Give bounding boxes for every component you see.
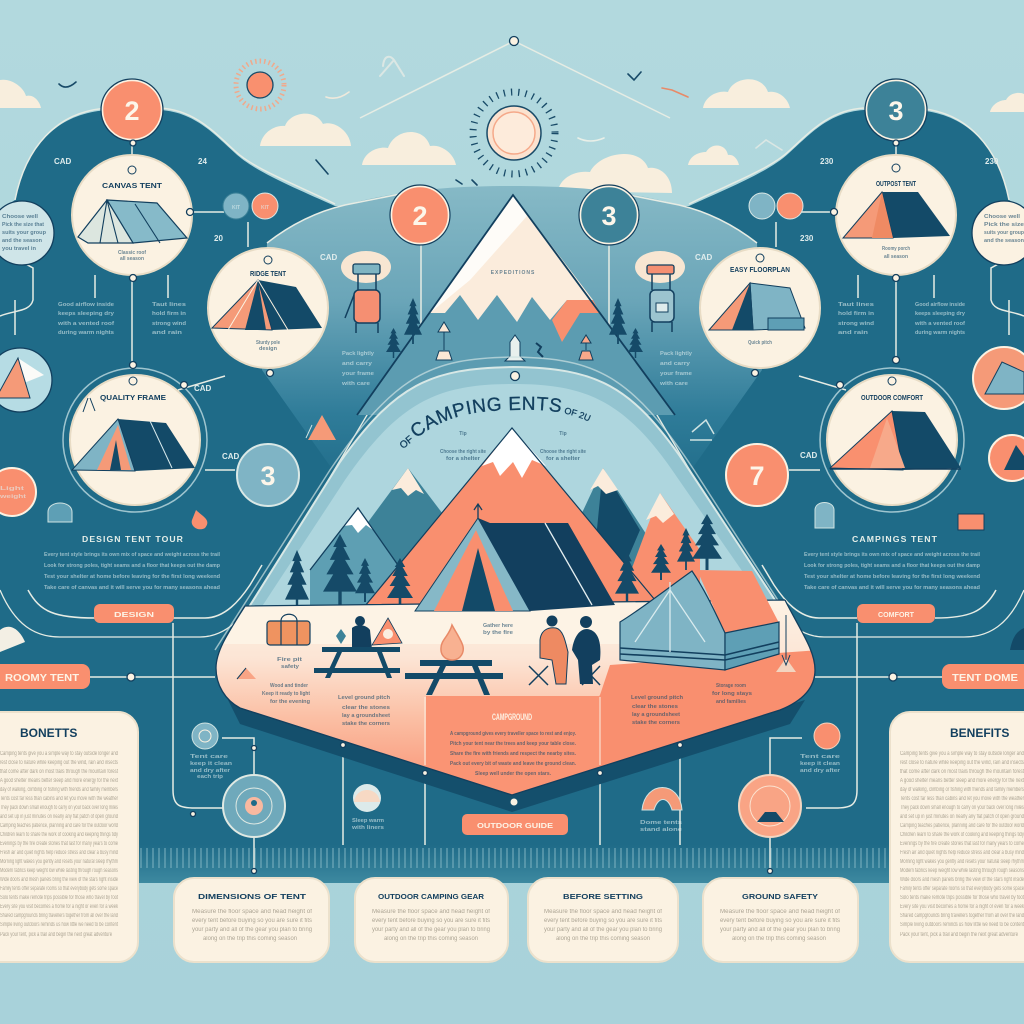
side circle: top right: and the season <box>984 238 1024 244</box>
benefits panel left: Family tents offer separate rooms so that everybody gets some space <box>0 886 118 892</box>
bottom card 4: every tent before buying so you are sure it fits <box>720 918 840 924</box>
benefits panel left <box>0 712 138 962</box>
badge 3 centre: 3 <box>601 201 617 231</box>
benefits panel left: Every site you visit becomes a home for a night or even for a week <box>0 904 119 910</box>
small numeric labels: CAD <box>800 451 818 460</box>
text block: left under circle 1: keeps sleeping dry <box>58 311 114 317</box>
small plate labels: Gather here <box>483 623 513 629</box>
badge 2 left top <box>101 79 163 146</box>
side circle: top left: Pick the size that <box>2 222 44 228</box>
small plate labels: Level ground pitch <box>338 695 390 701</box>
text block: left under circle 1: and rain <box>152 330 182 336</box>
side circle: top right: Choose well <box>984 214 1021 220</box>
side circle: top left: suits your group <box>2 230 46 236</box>
bottom plate marker <box>510 798 518 806</box>
small plate labels: stake the corners <box>342 721 390 727</box>
arch top marker <box>510 372 520 380</box>
text block: right under circle 1: Good airflow inside <box>915 302 965 308</box>
text block: lower left heading: Look for strong poles, tight seams and a floor that keeps out the damp <box>44 563 220 569</box>
bottom card 1: DIMENSIONS OF TENT <box>198 894 307 901</box>
captions beside bottom icons: Tent care <box>190 754 228 760</box>
tent circle: left top: CANVAS TENT <box>102 183 163 190</box>
captions beside bottom icons: and dry after <box>190 768 230 774</box>
small plate labels: Storage room <box>716 683 747 689</box>
left dome shape <box>0 627 25 652</box>
small plate labels <box>262 623 752 727</box>
benefits panel left: Pack your tent, pick a trail and begin the next great adventure <box>0 932 112 938</box>
plate outline <box>216 600 815 795</box>
bottom card 4: along on the trip this coming season <box>732 936 826 942</box>
small round icons right pair <box>749 193 803 219</box>
bottom card 2: OUTDOOR CAMPING GEAR <box>378 894 484 901</box>
mountain pins and markers <box>436 322 593 361</box>
captions beside bottom icons: Sleep warm <box>352 818 385 824</box>
pill: left lower: ROOMY TENT <box>5 673 79 684</box>
small plate labels: lay a groundsheet <box>632 712 680 718</box>
arch small captions: for a shelter <box>546 456 580 462</box>
text block: left under circle 1: strong wind <box>152 321 186 327</box>
campground text block: Pitch your tent near the trees and keep your table close. <box>450 741 577 747</box>
small plate labels: Level ground pitch <box>631 695 683 701</box>
small plate labels: clear the stones <box>342 705 390 711</box>
bottom card 3 <box>528 878 678 962</box>
mountain peak: EXPEDITIONS <box>491 270 535 276</box>
text block: left under circle 1: hold firm in <box>152 311 186 317</box>
small plate labels: by the fire <box>483 630 513 636</box>
text block: left under circle 1 <box>57 302 186 336</box>
text block: left under circle 1: Good airflow inside <box>58 302 114 308</box>
side badge: coral left <box>0 468 36 516</box>
text block: lower left heading <box>44 535 221 591</box>
side text under backpacks: with care <box>341 381 370 387</box>
pine trees beside the mountain <box>386 298 643 358</box>
tent circle: left middle: design <box>259 346 277 352</box>
campsite plate shadow <box>228 700 805 812</box>
tent circle: right middle: Quick pitch <box>748 340 772 346</box>
main sun with peak line <box>360 36 670 174</box>
bottom card 3: BEFORE SETTING <box>563 894 644 901</box>
small numeric labels <box>54 157 999 461</box>
tent circle: left bottom <box>63 368 207 512</box>
benefits panel left: A good shelter means better sleep and more energy for the next <box>0 778 118 784</box>
central mid-teal region <box>262 186 762 480</box>
text block: lower right heading: Take care of canvas and it will serve you for many seasons ahead <box>804 585 980 591</box>
small plate labels: lay a groundsheet <box>342 713 390 719</box>
side text under backpacks: with care <box>659 381 688 387</box>
arch small captions: Tip <box>459 431 467 437</box>
tent circle: right middle: EASY FLOORPLAN <box>730 267 790 274</box>
tent circle: left bottom: QUALITY FRAME <box>100 395 166 402</box>
tent circle: right middle <box>700 248 820 368</box>
bottom card 2: every tent before buying so you are sure it fits <box>372 918 490 924</box>
bottom card 4 <box>703 878 858 962</box>
benefits panel left: Evenings by the fire create stories that last for many years to come <box>0 841 118 847</box>
tent circle: left middle <box>208 248 328 368</box>
bottom card 3: Measure the floor space and head height of <box>544 909 662 915</box>
benefits panel left: Solo tents make remote trips possible for those who travel by foot <box>0 895 118 901</box>
pill: right lower: TENT DOME <box>952 673 1018 684</box>
arch small captions: Tip <box>559 431 567 437</box>
text block: right under circle 1: strong wind <box>838 321 874 327</box>
side circle: tent left <box>0 348 52 412</box>
small sun <box>236 61 284 109</box>
text block: lower right heading <box>804 535 981 591</box>
arch small captions: for a shelter <box>446 456 480 462</box>
tent circle: left middle: Sturdy pole <box>256 340 280 346</box>
text block: lower right heading: Every tent style brings its own mix of space and weight across the trail <box>804 552 981 558</box>
benefits panel right <box>890 712 1024 962</box>
badge 3 centre <box>579 185 639 245</box>
text block: right under circle 1: during warm nights <box>915 330 965 336</box>
small round icons left pair: KIT <box>232 205 240 211</box>
pill: centre bottom: OUTDOOR GUIDE <box>477 821 553 830</box>
tent circle: right bottom: OUTDOOR COMFORT <box>861 395 924 402</box>
picnic table left <box>314 647 400 678</box>
captions beside bottom icons: keep it clean <box>800 761 840 767</box>
tent circle: right top: OUTPOST TENT <box>876 181 917 188</box>
bottom card 2: Measure the floor space and head height of <box>372 909 490 915</box>
side circle: top left <box>0 201 54 265</box>
tent circle: left top <box>72 155 192 275</box>
side circle: top left: and the season <box>2 238 42 244</box>
arch small captions <box>440 431 586 462</box>
forest trees <box>285 514 722 612</box>
bottom card 4: your party and all of the gear you plan to bring <box>720 927 840 933</box>
captions beside bottom icons <box>190 754 840 833</box>
bottom card 4: Measure the floor space and head height of <box>720 909 840 915</box>
captions beside bottom icons: and dry after <box>800 768 840 774</box>
captions beside bottom icons: keep it clean <box>190 761 232 767</box>
pill: right upper <box>857 604 935 623</box>
side circle: top right <box>972 201 1024 265</box>
text block: right under circle 1: and rain <box>838 330 868 336</box>
small numeric labels: CAD <box>222 452 240 461</box>
text block: lower left heading: Take care of canvas and it will serve you for many seasons ahead <box>44 585 220 591</box>
people seated pair <box>529 616 600 685</box>
tent circle: left middle: RIDGE TENT <box>250 271 287 278</box>
badge 2 centre: 2 <box>412 201 428 231</box>
benefits panel left: Camping teaches patience, planning and care for the outdoor world <box>0 823 118 829</box>
small numeric labels: CAD <box>54 157 72 166</box>
bottom card 1: Measure the floor space and head height of <box>192 909 312 915</box>
bottom card 3: along on the trip this coming season <box>556 936 650 942</box>
benefits panel left: day of walking, climbing or fishing with friends and family members <box>0 787 118 793</box>
side badge: coral left: weight <box>0 494 27 500</box>
small plate labels: clear the stones <box>632 704 678 710</box>
text block: lower left heading: DESIGN TENT TOUR <box>82 535 184 544</box>
picnic table centre <box>405 660 503 695</box>
benefits panel left: Modern fabrics keep weight low while lasting through rough seasons <box>0 868 118 874</box>
small numeric labels: 230 <box>820 157 834 166</box>
text block: lower left heading: Every tent style brings its own mix of space and weight across the trail <box>44 552 221 558</box>
side text under backpacks: Pack lightly <box>660 351 692 357</box>
text block: right under circle 1: with a vented roof <box>914 321 965 327</box>
side text under backpacks <box>341 351 692 387</box>
bottom card 3: your party and all of the gear you plan to bring <box>544 927 662 933</box>
hump outline strokes <box>15 108 1009 204</box>
birds and sky marks <box>59 57 782 185</box>
benefits panel left: rest close to nature while keeping out the wind, rain and insects <box>0 760 118 766</box>
small numeric labels: 20 <box>214 234 223 243</box>
small numeric labels: CAD <box>695 253 713 262</box>
side circle: top right: suits your group <box>984 230 1024 236</box>
right dome shape <box>1010 628 1024 650</box>
decorative lines around centre arch <box>215 357 810 650</box>
bottom card 4: GROUND SAFETY <box>742 894 818 901</box>
badge 3 lower left <box>237 444 299 506</box>
plate dividers <box>425 697 600 765</box>
tent circle: left top: all season <box>120 256 144 262</box>
small plate labels: stake the corners <box>632 720 680 726</box>
side text under backpacks: your frame <box>660 371 692 377</box>
connector lines <box>0 140 1024 872</box>
captions beside bottom icons: with liners <box>351 825 384 831</box>
side text under backpacks: Pack lightly <box>342 351 374 357</box>
small round icons left pair <box>223 193 278 219</box>
bottom icons <box>192 723 840 837</box>
pill: right lower <box>942 664 1024 689</box>
benefits panel left: Shared campgrounds bring travellers together from all over the land <box>0 913 118 919</box>
tent circle: right top: Roomy porch <box>882 246 910 252</box>
small plate labels: Fire pit <box>277 657 302 663</box>
bottom card 2: along on the trip this coming season <box>384 936 478 942</box>
tent circle: right bottom <box>820 368 964 512</box>
side text under backpacks: and carry <box>660 361 690 367</box>
text block: right under circle 1 <box>838 302 965 336</box>
text block: left under circle 1: Taut lines <box>152 302 186 308</box>
badge 2 centre <box>390 185 450 245</box>
tent circle: right top <box>836 155 956 275</box>
small round icons left pair: KIT <box>261 205 269 211</box>
campground text block: Sleep well under the open stars. <box>475 771 552 777</box>
tent circle: left top: Classic roof <box>118 250 146 256</box>
gear bag <box>267 614 310 645</box>
connector dots <box>127 208 900 874</box>
captions beside bottom icons: Dome tents <box>640 820 682 826</box>
badge 7 lower right: 7 <box>749 461 765 491</box>
tent circle: right top: all season <box>884 254 908 260</box>
mountain peak <box>357 195 675 415</box>
benefits panel left: and set up in just minutes on nearly any flat patch of open ground <box>0 814 118 820</box>
small plate labels: and families <box>716 699 746 705</box>
text block: lower right heading: CAMPINGS TENT <box>852 535 938 544</box>
benefits panel left: Children learn to share the work of cooking and keeping things tidy <box>0 832 118 838</box>
text block: left under circle 1: during warm nights <box>58 330 114 336</box>
badge 2 left top: 2 <box>124 96 140 126</box>
bottom card 1: your party and all of the gear you plan to bring <box>192 927 312 933</box>
arch small captions: Choose the right site <box>440 449 486 455</box>
benefits panel left: They pack down small enough to carry on your back over long miles <box>0 805 118 811</box>
pill: left upper <box>94 604 174 623</box>
background mountains <box>310 468 700 605</box>
text block: lower right heading: Test your shelter at home before leaving for the first long weekend <box>804 574 980 580</box>
small plate labels: safety <box>281 664 299 670</box>
side circle: top right: Pick the size <box>984 222 1024 228</box>
pill: right upper: COMFORT <box>878 612 915 619</box>
bottom card 3: every tent before buying so you are sure it fits <box>544 918 662 924</box>
text block: lower left heading: Test your shelter at home before leaving for the first long weekend <box>44 574 220 580</box>
side text under backpacks: your frame <box>342 371 374 377</box>
bottom card 2 <box>355 878 508 962</box>
side circle: top left: Choose well <box>2 214 39 220</box>
campground text block: Pack out every bit of waste and leave the ground clean. <box>450 761 577 767</box>
grass strip <box>0 845 1024 883</box>
central region outline <box>267 190 757 243</box>
central arch panel <box>222 367 808 790</box>
bottom card 1 <box>174 878 329 962</box>
text block: left under circle 1: with a vented roof <box>57 321 114 327</box>
campsite plate <box>210 598 820 800</box>
big coral mountain <box>365 428 660 606</box>
captions beside bottom icons: stand alone <box>640 827 682 833</box>
bottom card 2: your party and all of the gear you plan to bring <box>372 927 490 933</box>
title: OF CAMPING ENTS OF 2U <box>400 396 591 448</box>
captions beside bottom icons: each trip <box>197 774 223 780</box>
benefits panel left: Wide doors and mesh panels bring the view of the stars right inside <box>0 877 118 883</box>
badge 7 lower right <box>726 444 788 506</box>
campground text block: CAMPGROUND <box>492 712 532 722</box>
pill: left lower <box>0 664 90 689</box>
small plate tents <box>237 615 796 679</box>
small plate labels: Keep it ready to light <box>262 691 310 697</box>
small numeric labels: 230 <box>800 234 814 243</box>
clouds <box>0 79 1024 193</box>
benefits panel left: Fresh air and quiet nights help reduce stress and clear a busy mind <box>0 850 118 856</box>
benefits panel left: Camping tents give you a simple way to stay outside longer and <box>0 751 118 757</box>
seated person and small fire <box>336 616 402 650</box>
large house tent right <box>620 570 779 670</box>
benefits panel left: Tents cost far less than cabins and let you move with the weather <box>0 796 118 802</box>
pill: centre bottom <box>462 814 568 835</box>
pill: left upper: DESIGN <box>114 612 154 619</box>
small numeric labels: CAD <box>320 253 338 262</box>
side badge: coral left: Light <box>0 486 25 492</box>
text block: right under circle 1: Taut lines <box>838 302 874 308</box>
backpack right <box>635 251 685 332</box>
badge 3 lower left: 3 <box>260 461 276 491</box>
bottom card 1: every tent before buying so you are sure it fits <box>192 918 312 924</box>
main tent <box>415 504 615 611</box>
campground text block: A campground gives every traveller space to rest and enjoy. <box>450 731 577 737</box>
backpack left <box>341 251 391 333</box>
small numeric labels: 230 <box>985 157 999 166</box>
benefits panel left: Morning light wakes you gently and resets your natural sleep rhythm <box>0 859 118 865</box>
small numeric labels: CAD <box>194 384 212 393</box>
small plate labels: for long stays <box>712 691 752 697</box>
badge 3 right top <box>865 79 927 146</box>
campfire flame <box>441 625 463 660</box>
side text under backpacks: and carry <box>342 361 372 367</box>
side circle: top left: you travel in <box>2 246 36 252</box>
benefits panel left: Simple living outdoors reminds us how little we need to be content <box>0 922 118 928</box>
arch small captions: Choose the right site <box>540 449 586 455</box>
text block: right under circle 1: hold firm in <box>838 311 874 317</box>
side circle: tent right <box>973 347 1024 409</box>
dark teal background shape <box>0 110 1024 883</box>
badge 3 right top: 3 <box>888 96 904 126</box>
text block: right under circle 1: keeps sleeping dry <box>915 311 965 317</box>
campground text block <box>450 712 577 777</box>
text block: lower right heading: Look for strong poles, tight seams and a floor that keeps out the damp <box>804 563 980 569</box>
bottom card 1: along on the trip this coming season <box>203 936 297 942</box>
benefits panel right: BENEFITS <box>950 726 1009 740</box>
benefits panel left: BONETTS <box>20 726 77 740</box>
inner arch <box>240 384 790 640</box>
small plate labels: Wood and tinder <box>270 683 308 689</box>
side badge: coral right <box>989 435 1024 481</box>
small plate labels: for the evening <box>270 699 310 705</box>
small icon: lanterns left and right <box>48 415 984 530</box>
campground text block: Share the fire with friends and respect the nearby sites. <box>450 751 577 757</box>
small numeric labels: 24 <box>198 157 207 166</box>
captions beside bottom icons: Tent care <box>800 754 840 760</box>
benefits panel left: that come after dark on most trails through the mountain forest <box>0 769 118 775</box>
